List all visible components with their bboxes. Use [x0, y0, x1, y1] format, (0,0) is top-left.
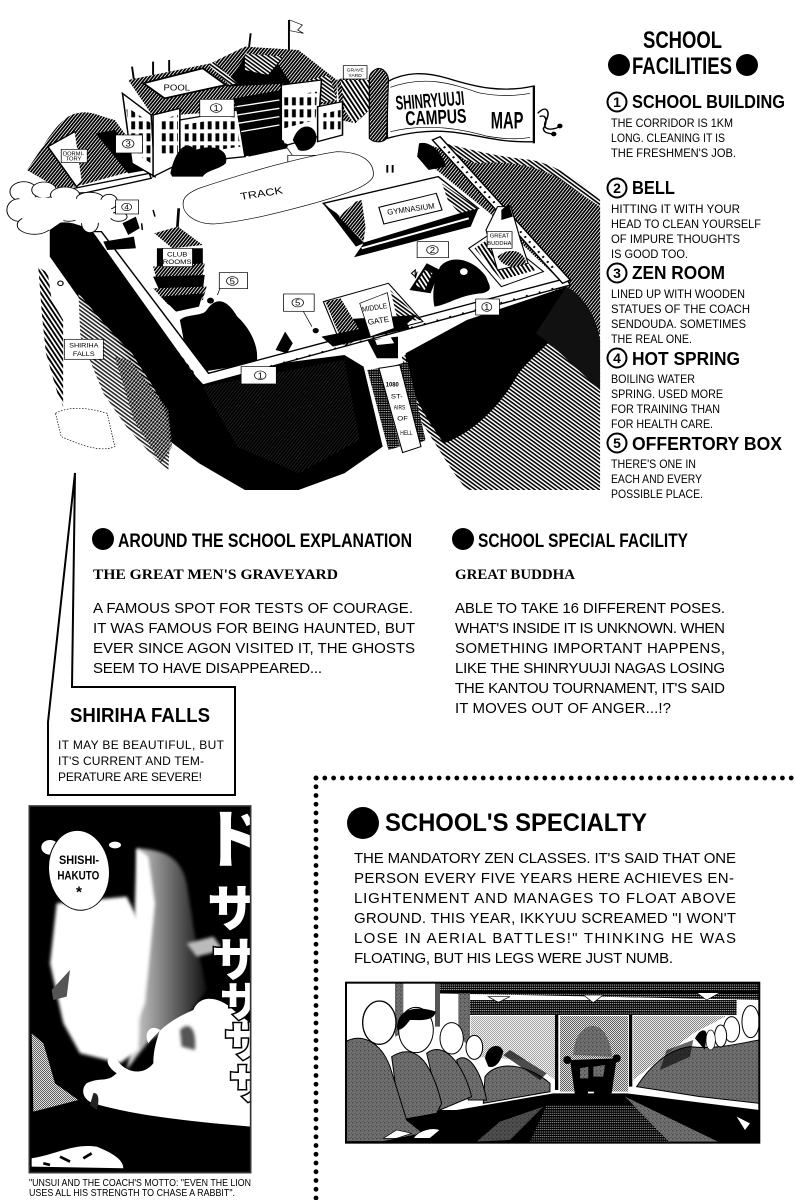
subheading: graveyard: THE GREAT MEN'S GRAVEYARD	[93, 567, 338, 583]
falls label	[64, 339, 103, 359]
item 3: zen room: THE REAL ONE.	[611, 332, 692, 346]
item 2: bell: IS GOOD TOO.	[611, 247, 688, 261]
item 2: bell: HITTING IT WITH YOUR	[611, 202, 740, 216]
speech bubble: HAKUTO	[57, 868, 99, 882]
graveyard text: A FAMOUS SPOT FOR TESTS OF COURAGE.	[93, 600, 413, 617]
item 1: school building: LONG. CLEANING IT IS	[611, 131, 725, 145]
marker 3	[116, 135, 142, 153]
marker 5 top: 5	[299, 160, 304, 169]
map banner: SHINRYUUJI	[394, 87, 465, 115]
sound effect katakana: サ	[224, 1009, 266, 1069]
specialty text: GROUND. THIS YEAR, IKKYUU SCREAMED "I WON'T	[354, 910, 736, 927]
bell	[409, 242, 490, 307]
marker 5 top	[282, 143, 315, 173]
graveyard text: EVER SINCE AGON VISITED IT, THE GHOSTS	[93, 640, 415, 657]
panel: school special facility	[452, 528, 725, 717]
item 5: offertory box: THERE'S ONE IN	[611, 457, 696, 471]
waterfall caption: USES ALL HIS STRENGTH TO CHASE A RABBIT".	[29, 1187, 235, 1199]
item 4: hot spring: SPRING. USED MORE	[611, 387, 723, 401]
callout text	[58, 738, 225, 784]
heading: around the school explanation	[92, 528, 412, 552]
label: dormitory	[61, 149, 87, 163]
item 4: hot spring	[608, 348, 740, 431]
altar	[563, 1026, 621, 1103]
specialty text: FLOATING, BUT HIS LEGS WERE JUST NUMB.	[354, 950, 673, 967]
falls label: SHIRIHA	[69, 343, 99, 349]
middle gate	[284, 283, 423, 358]
marker 5 gate: 5	[295, 298, 300, 307]
pool: POOL	[164, 83, 190, 93]
item 5: offertory box: 5	[613, 435, 621, 451]
item 2: bell	[608, 178, 761, 261]
marker 5 pagoda: 5	[230, 277, 235, 286]
marker 1 south wall	[241, 367, 276, 384]
graveyard label: YARD	[348, 73, 363, 78]
subheading: great buddha: GREAT BUDDHA	[455, 567, 575, 583]
left and center forest	[50, 222, 383, 490]
back wall	[471, 1015, 727, 1092]
gate label: MIDDLE	[361, 302, 388, 314]
monks left row	[346, 1001, 550, 1142]
stair label: ST-	[391, 393, 403, 400]
spray clouds	[83, 999, 251, 1127]
item 4: hot spring: BOILING WATER	[611, 372, 695, 386]
specialty text: PERSON EVERY FIVE YEARS HERE ACHIEVES EN-	[354, 870, 734, 887]
back trees	[27, 78, 369, 190]
club label: ROOMS	[163, 258, 192, 266]
speech bubble	[41, 827, 121, 913]
marker 1: 1	[214, 104, 219, 113]
item 1: school building: SCHOOL BUILDING	[632, 92, 785, 112]
callout text: IT'S CURRENT AND TEM-	[58, 754, 204, 768]
scroll roll	[369, 68, 388, 142]
item 2: bell: BELL	[632, 178, 675, 198]
club label: CLUB	[167, 251, 188, 258]
monks right row	[637, 1006, 759, 1103]
item 1: school building	[608, 92, 785, 160]
dormitory	[48, 123, 147, 187]
item 1: school building: THE CORRIDOR IS 1KM	[611, 116, 733, 130]
marker 1 east wall: 1	[484, 303, 489, 312]
gym label	[379, 193, 442, 224]
sound effect katakana: サ	[207, 870, 257, 942]
graveyard text: IT WAS FAMOUS FOR BEING HAUNTED, BUT	[93, 620, 415, 637]
great buddha	[469, 203, 543, 287]
heading: around the school explanation: AROUND THE SCHOOL EXPLANATION	[118, 531, 412, 552]
item 5: offertory box	[608, 434, 782, 501]
track	[183, 152, 393, 224]
item 4: hot spring: HOT SPRING	[632, 349, 740, 369]
item 3: zen room: STATUES OF THE COACH	[611, 302, 750, 316]
heading: special facility: SCHOOL SPECIAL FACILITY	[478, 531, 688, 552]
pool	[144, 68, 226, 98]
marker 1	[200, 99, 234, 117]
callout text: PERATURE ARE SEVERE!	[58, 770, 202, 784]
floor	[346, 1093, 759, 1143]
buddha text: LIKE THE SHINRYUUJI NAGAS LOSING	[455, 660, 725, 677]
buddha text	[455, 600, 725, 717]
item 5: offertory box: OFFERTORY BOX	[632, 434, 782, 454]
sound effect katakana: ド	[203, 790, 267, 881]
map banner: MAP	[491, 108, 523, 134]
sound effect katakana: サ	[212, 924, 258, 991]
speech bubble: *	[76, 884, 82, 901]
graveyard text	[93, 600, 415, 677]
item 5: offertory box: EACH AND EVERY	[611, 472, 702, 486]
heading: special facility	[452, 528, 688, 552]
callout title: SHIRIHA FALLS	[70, 705, 210, 727]
track: TRACK	[239, 185, 285, 203]
hot spring	[7, 182, 155, 250]
right forest	[402, 140, 600, 490]
sound effect katakana: サ	[220, 969, 261, 1029]
map banner	[369, 68, 563, 143]
dotted border	[316, 778, 797, 1200]
heading: specialty: SCHOOL'S SPECIALTY	[385, 809, 647, 837]
marker 4	[116, 200, 139, 214]
gate label: GATE	[367, 314, 390, 327]
buddha text: SOMETHING IMPORTANT HAPPENS,	[455, 640, 725, 657]
club label	[163, 248, 192, 267]
item 5: offertory box: POSSIBLE PLACE.	[611, 487, 703, 501]
waterfall	[50, 848, 223, 1070]
item 3: zen room: SENDOUDA. SOMETIMES	[611, 317, 746, 331]
graveyard text: SEEM TO HAVE DISAPPEARED...	[93, 660, 322, 677]
item 1: school building: 1	[613, 94, 621, 110]
item 3: zen room: 3	[613, 265, 621, 281]
left rock	[52, 970, 70, 1000]
stairs	[367, 362, 426, 453]
front trees	[170, 146, 226, 177]
flag	[290, 20, 303, 33]
gymnasium	[323, 177, 478, 257]
buddha text: ABLE TO TAKE 16 DIFFERENT POSES.	[455, 600, 725, 617]
item 1: school building: THE FRESHMEN'S JOB.	[611, 146, 736, 160]
marker 1 east wall	[476, 299, 499, 315]
buddha text: IT MOVES OUT OF ANGER...!?	[455, 700, 671, 717]
sound effect katakana: サ	[229, 1050, 271, 1110]
falls label: FALLS	[73, 351, 95, 358]
buddha label	[487, 232, 512, 248]
panel: school's specialty	[347, 807, 736, 967]
buddha text: THE KANTOU TOURNAMENT, IT'S SAID	[455, 680, 725, 697]
specialty text: LOSE IN AERIAL BATTLES!" THINKING HE WAS	[354, 930, 736, 947]
specialty text: THE MANDATORY ZEN CLASSES. IT'S SAID THAT ONE	[354, 850, 736, 867]
campus map	[7, 20, 600, 490]
buddha text: WHAT'S INSIDE IT IS UNKNOWN. WHEN	[455, 620, 725, 637]
item 3: zen room	[608, 263, 750, 346]
hall ceiling	[395, 983, 759, 1047]
waterfall caption	[29, 1177, 251, 1199]
manga panel: waterfall	[28, 805, 252, 1174]
graveyard label	[341, 66, 369, 123]
item 3: zen room: LINED UP WITH WOODEN	[611, 287, 745, 301]
marker 4: 4	[124, 203, 130, 212]
label: dormitory: TORY	[66, 157, 82, 163]
item 2: bell: HEAD TO CLEAN YOURSELF	[611, 217, 761, 231]
map banner: CAMPUS	[405, 105, 467, 130]
heading: school facilities: SCHOOL	[643, 27, 722, 54]
callout text: IT MAY BE BEAUTIFUL, BUT	[58, 738, 225, 752]
stair label: OF	[397, 415, 409, 422]
ground	[29, 1033, 251, 1173]
panel: school facilities	[608, 27, 785, 501]
item 4: hot spring: 4	[613, 350, 621, 366]
callout: shiriha falls	[48, 473, 235, 795]
waterfall caption: "UNSUI AND THE COACH'S MOTTO: "EVEN THE LION	[29, 1177, 251, 1189]
label: dormitory: DORMI-	[63, 152, 84, 157]
marker 1 south wall: 1	[258, 371, 263, 380]
manga panel: zen class	[346, 983, 759, 1143]
specialty text	[354, 850, 736, 967]
speech bubble: SHISHI-	[59, 853, 99, 867]
item 3: zen room: ZEN ROOM	[632, 263, 725, 283]
item 2: bell: 2	[613, 180, 621, 196]
sound effect katakana	[210, 812, 250, 1104]
club rooms pagoda	[153, 208, 248, 312]
item 4: hot spring: FOR TRAINING THAN	[611, 402, 720, 416]
gym label: GYMNASIUM	[386, 201, 435, 217]
item 4: hot spring: FOR HEALTH CARE.	[611, 417, 713, 431]
shiriha falls	[38, 267, 172, 470]
buddha label: GREAT	[490, 234, 510, 240]
marker 2: 2	[430, 246, 435, 255]
stair label	[386, 381, 413, 437]
marker 3: 3	[126, 139, 131, 149]
school building	[116, 20, 343, 177]
heading: school facilities	[608, 27, 758, 80]
campus walls	[57, 137, 570, 385]
panel: around the school	[92, 528, 415, 677]
stair label: AIRS	[394, 404, 405, 411]
heading: school facilities: FACILITIES	[632, 53, 732, 80]
buddha label: BUDDHA	[487, 241, 512, 247]
gate label	[360, 293, 394, 337]
item 2: bell: OF IMPURE THOUGHTS	[611, 232, 740, 246]
stair label: HELL	[400, 429, 413, 437]
specialty text: LIGHTENMENT AND MANAGES TO FLOAT ABOVE	[354, 890, 736, 907]
stair label: 1080	[386, 381, 399, 388]
graveyard label: GRAVE	[347, 68, 364, 72]
